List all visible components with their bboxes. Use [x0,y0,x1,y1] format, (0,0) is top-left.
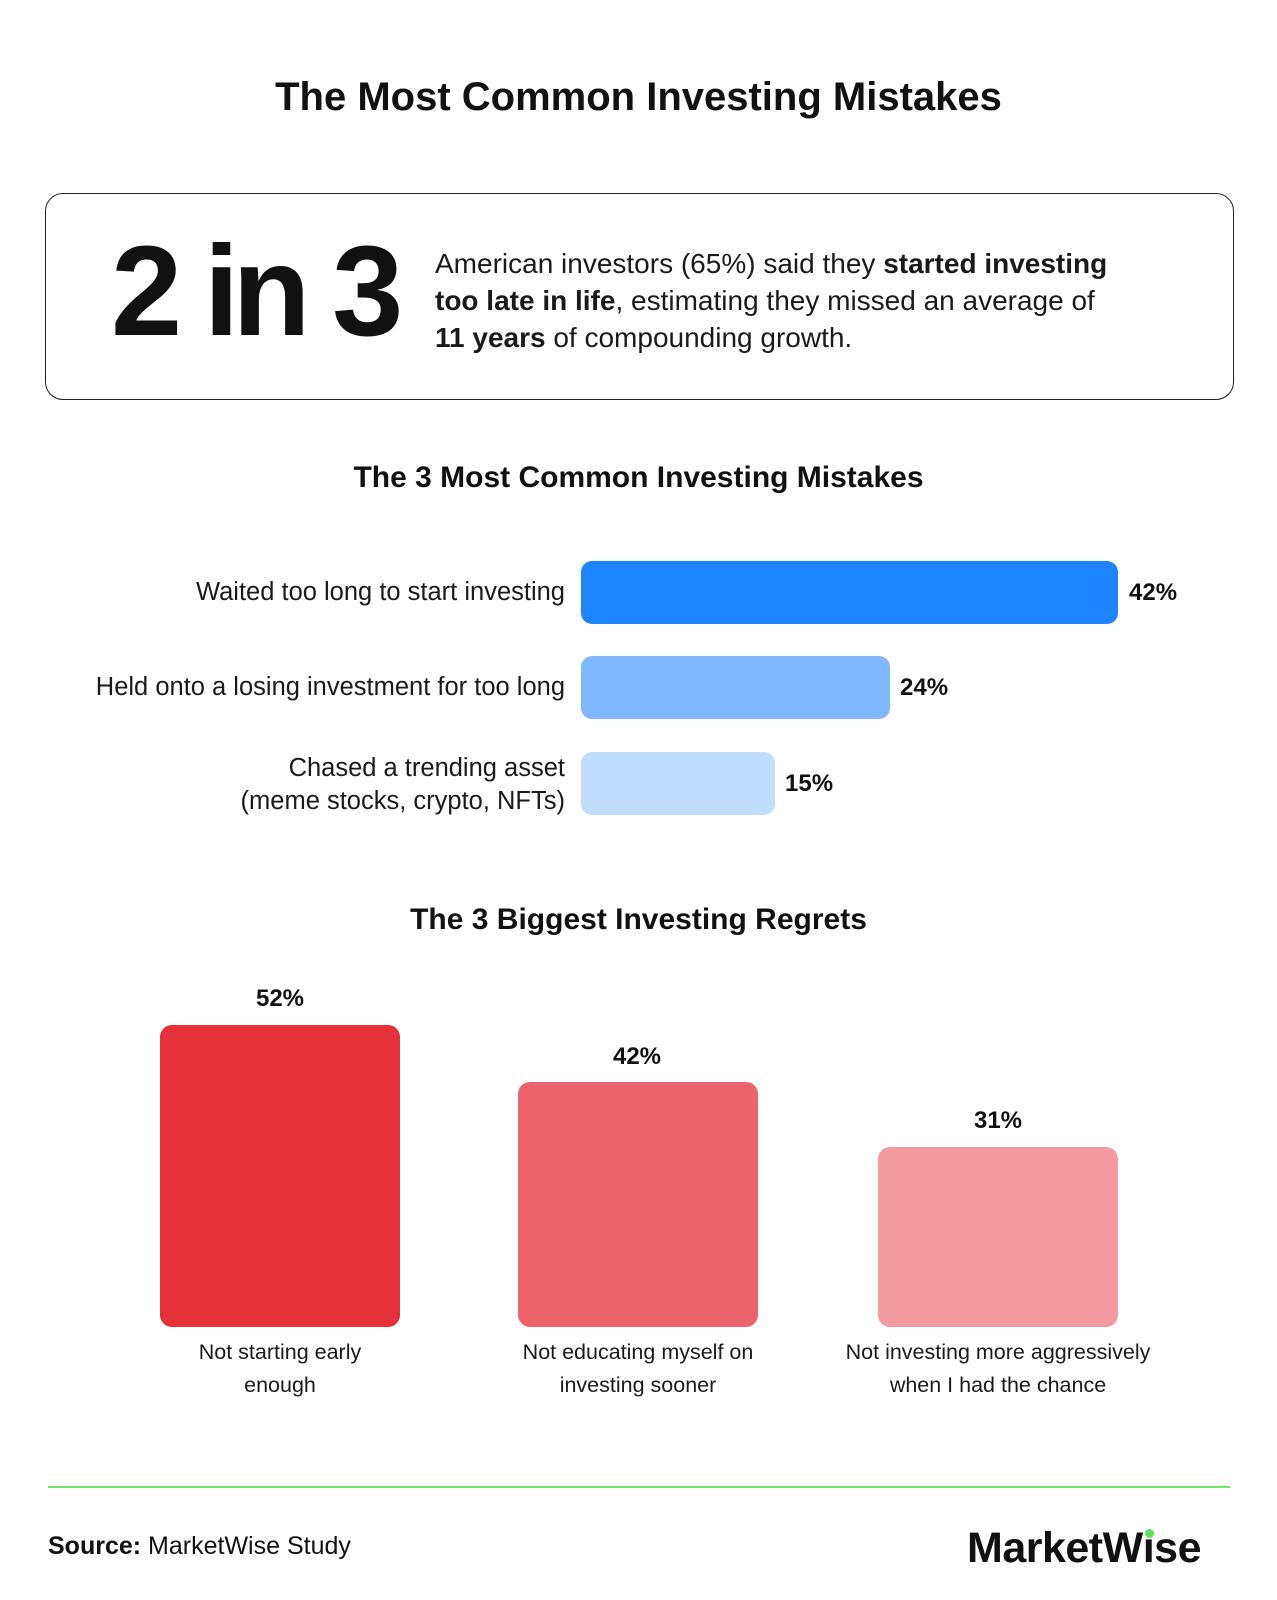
value 1: 52% [256,985,304,1012]
category 1 [199,1340,362,1397]
big stat: 2 in 3 [111,220,396,363]
category 2: Not educating myself on [523,1340,753,1364]
logo: MarketWise: MarketWıse [967,1524,1201,1572]
category 3: when I had the chance [890,1373,1106,1397]
bar 2 [581,656,890,719]
label 3: Chased a trending asset [289,754,565,782]
heading: regrets: The 3 Biggest Investing Regrets [410,903,867,936]
category 1: Not starting early [199,1340,361,1364]
source: Source: MarketWise Study [48,1532,351,1560]
category 3 [846,1340,1150,1397]
label 1: Waited too long to start investing [196,578,565,606]
category 2 [523,1340,753,1397]
bar chart: mistakes [96,561,1177,815]
label 3 [241,754,565,815]
column 1 [160,1025,400,1327]
column 3 [878,1147,1118,1327]
category 2: investing sooner [560,1373,716,1397]
label 3: (meme stocks, crypto, NFTs) [241,787,565,815]
stat description: 11 years of compounding growth. [435,322,852,353]
stat description: American investors (65%) said they started investing [435,248,1107,279]
label 2: Held onto a losing investment for too long [96,673,565,701]
value 1: 42% [1129,579,1177,606]
value 2: 42% [613,1043,661,1070]
value 2: 24% [900,674,948,701]
stat description [435,248,1107,353]
title: The Most Common Investing Mistakes [275,75,1002,119]
category 3: Not investing more aggressively [846,1340,1150,1364]
stat description: too late in life, estimating they missed an average of [435,285,1095,316]
bar 3 [581,752,775,815]
value 3: 15% [785,770,833,797]
panel: 2 in 3 stat [45,193,1234,400]
heading: mistakes: The 3 Most Common Investing Mistakes [353,461,924,494]
value 3: 31% [974,1107,1022,1134]
column 2 [518,1082,758,1327]
bar 1 [581,561,1118,624]
column chart: regrets [160,985,1150,1397]
category 1: enough [244,1373,316,1397]
